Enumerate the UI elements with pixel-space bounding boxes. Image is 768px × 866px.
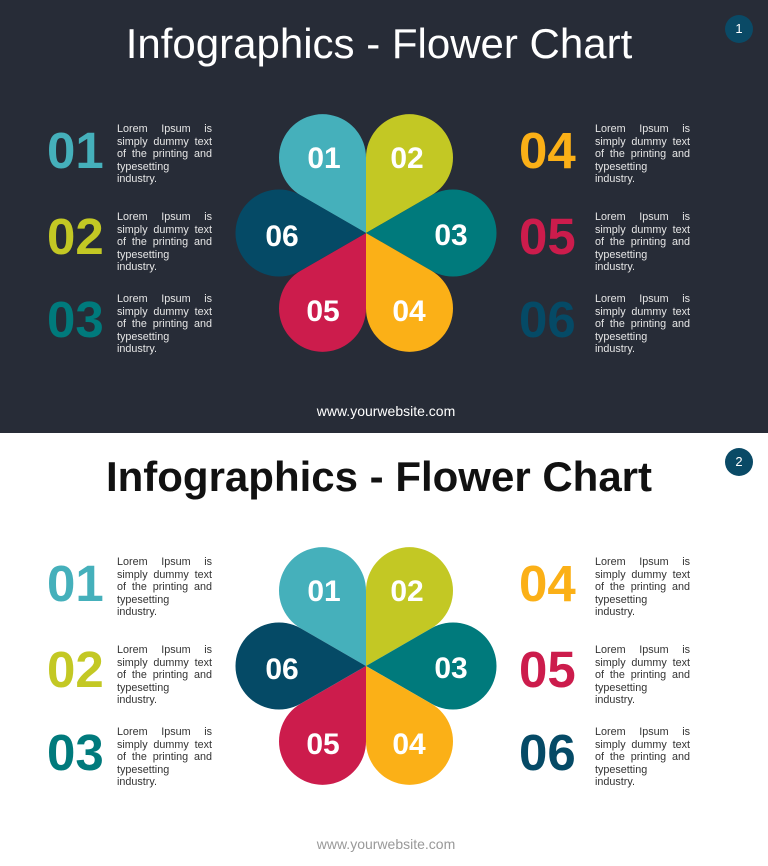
right item 04: 04 [519,555,576,612]
right item 05: 05 [519,208,576,265]
right item 05 [519,208,690,273]
flower chart: 03 [434,652,468,685]
flower chart: 01 [307,142,341,175]
left item 03: Lorem Ipsum is simply dummy text of the printing and typesetting [117,293,212,343]
left item 03: Lorem Ipsum is simply dummy text of the printing and typesetting [117,726,212,776]
right item 04: Lorem Ipsum is simply dummy text of the printing and typesetting [595,123,690,173]
badge 1 [725,15,753,43]
flower chart: 01 [307,575,341,608]
right item 04 [519,122,690,185]
left item 03: industry. [117,343,157,355]
right item 05: Lorem Ipsum is simply dummy text of the printing and typesetting [595,211,690,261]
right item 06: Lorem Ipsum is simply dummy text of the printing and typesetting [595,726,690,776]
flower chart: 05 [306,728,340,761]
right item 05 [519,641,690,706]
right item 05: industry. [595,261,635,273]
right item 04: industry. [595,173,635,185]
left item 01 [47,122,212,185]
right item 06: industry. [595,343,635,355]
footer: www.yourwebsite.com [317,403,455,419]
left item 01 [47,555,212,618]
left item 01: industry. [117,606,157,618]
left item 02: industry. [117,694,157,706]
left item 01: 01 [47,122,104,179]
left item 03: 03 [47,291,104,348]
slide 2: light [0,433,768,866]
left item 01: Lorem Ipsum is simply dummy text of the printing and typesetting [117,123,212,173]
left item 02: 02 [47,208,104,265]
left item 01: Lorem Ipsum is simply dummy text of the printing and typesetting [117,556,212,606]
right item 06: 06 [519,724,576,781]
right item 06: industry. [595,776,635,788]
left item 03: industry. [117,776,157,788]
left item 02 [47,208,212,273]
flower chart: 06 [265,653,299,686]
title: Infographics - Flower Chart [126,20,632,67]
footer: www.yourwebsite.com [317,836,455,852]
slide 1: dark [0,0,768,433]
title: Infographics - Flower Chart [106,453,652,500]
badge 1: 1 [735,21,743,36]
left item 01: industry. [117,173,157,185]
flower chart: 02 [390,142,424,175]
left item 02 [47,641,212,706]
left item 02: industry. [117,261,157,273]
right item 05: 05 [519,641,576,698]
left item 02: Lorem Ipsum is simply dummy text of the printing and typesetting [117,211,212,261]
right item 04: Lorem Ipsum is simply dummy text of the printing and typesetting [595,556,690,606]
right item 06 [519,724,690,788]
flower chart: 02 [390,575,424,608]
left item 01: 01 [47,555,104,612]
flower chart: 06 [265,220,299,253]
left item 02: 02 [47,641,104,698]
right item 05: industry. [595,694,635,706]
right item 04: industry. [595,606,635,618]
badge 2: 2 [735,454,743,469]
left item 03: 03 [47,724,104,781]
flower chart: 03 [434,219,468,252]
right item 06: 06 [519,291,576,348]
left item 02: Lorem Ipsum is simply dummy text of the printing and typesetting [117,644,212,694]
right item 04: 04 [519,122,576,179]
right item 06: Lorem Ipsum is simply dummy text of the printing and typesetting [595,293,690,343]
flower chart: 05 [306,295,340,328]
left item 03 [47,724,212,788]
flower chart [236,114,496,352]
badge 2 [725,448,753,476]
left item 03 [47,291,212,355]
flower chart [236,547,496,785]
right item 06 [519,291,690,355]
flower chart: 04 [392,295,426,328]
flower chart: 04 [392,728,426,761]
right item 04 [519,555,690,618]
right item 05: Lorem Ipsum is simply dummy text of the printing and typesetting [595,644,690,694]
